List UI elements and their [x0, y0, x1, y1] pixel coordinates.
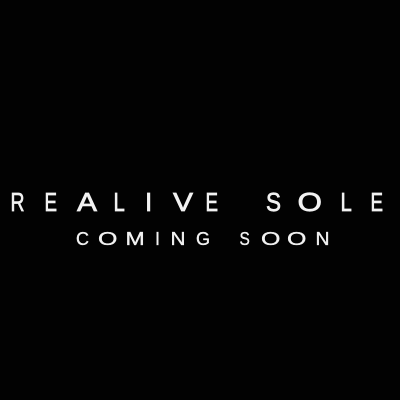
title: REALIVE SOLE: L — [340, 187, 352, 217]
title: REALIVE SOLE: O — [298, 187, 322, 217]
title: REALIVE SOLE: A — [77, 187, 98, 217]
title: REALIVE SOLE: L — [114, 187, 125, 217]
subtitle: COMING SOON: N — [316, 229, 330, 249]
subtitle: COMING SOON: S — [240, 229, 250, 249]
subtitle: COMING SOON: O — [287, 229, 306, 249]
subtitle: COMING SOON: N — [170, 229, 186, 249]
subtitle: COMING SOON: O — [261, 229, 280, 249]
title: REALIVE SOLE: E — [370, 187, 383, 217]
title: REALIVE SOLE: I — [145, 187, 152, 217]
title: REALIVE SOLE: V — [173, 187, 194, 217]
subtitle: COMING SOON: C — [76, 229, 89, 249]
subtitle: COMING SOON: I — [155, 229, 160, 249]
title: REALIVE SOLE: S — [266, 187, 281, 217]
title: REALIVE SOLE: E — [44, 187, 57, 217]
subtitle: COMING SOON: M — [126, 229, 145, 249]
subtitle: COMING SOON: O — [98, 229, 117, 249]
title: REALIVE SOLE: R — [10, 187, 24, 217]
subtitle: COMING SOON: G — [196, 229, 210, 249]
title: REALIVE SOLE: E — [206, 187, 218, 217]
